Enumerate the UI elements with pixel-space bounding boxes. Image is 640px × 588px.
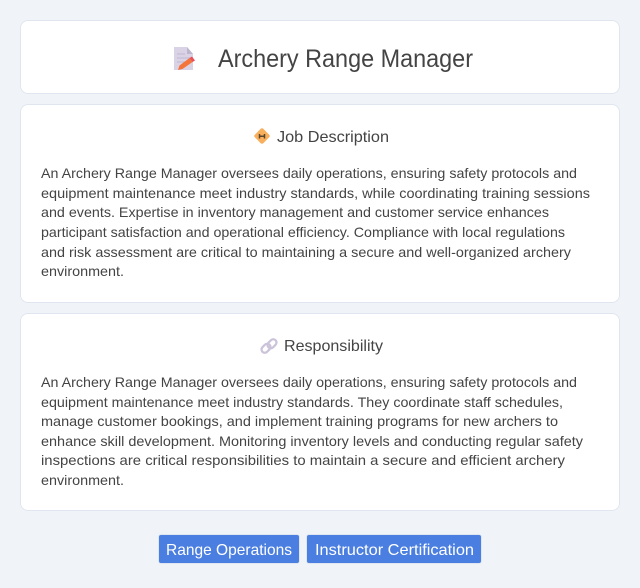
text block: job description: participant satisfaction and operational efficiency. Compliance with local regulations <box>41 224 565 240</box>
panel: job description <box>20 104 620 303</box>
text block: job description: environment. <box>41 263 124 279</box>
button: Instructor Certification <box>306 534 482 564</box>
text block: responsibility: enhance skill development. Monitoring inventory levels and conducting regular safety <box>41 433 583 449</box>
icon: document with pencil <box>174 47 195 70</box>
text block: responsibility: inspections are critical responsibilities to maintain a secure and efficient archery <box>41 452 565 468</box>
text block: responsibility <box>41 374 583 488</box>
text block: job description: An Archery Range Manager oversees daily operations, ensuring safety protocols and <box>41 165 577 181</box>
heading: responsibility: Responsibility <box>284 338 383 355</box>
panel: title header <box>20 20 620 94</box>
button: Instructor Certification: Instructor Certification <box>315 542 474 559</box>
text block: responsibility: environment. <box>41 472 124 488</box>
text block: job description: and events. Expertise in inventory management and customer service enhances <box>41 204 549 220</box>
text block: responsibility: manage customer bookings, and implement training programs for new archers to <box>41 413 558 429</box>
icon: link <box>260 338 278 354</box>
icon: orange diamond sign <box>254 128 270 144</box>
button: Range Operations: Range Operations <box>166 542 292 559</box>
panel: responsibility <box>20 313 620 511</box>
text block: job description: equipment maintenance meet industry standards, while coordinating training sessions <box>41 185 590 201</box>
text block: job description: and risk assessment are critical to maintaining a secure and well-organized archery <box>41 244 571 260</box>
text block: job description <box>41 165 590 279</box>
button: Range Operations <box>158 534 300 564</box>
heading: job description: Job Description <box>277 129 389 146</box>
text block: responsibility: equipment maintenance meet industry standards. They coordinate staff schedules, <box>41 394 563 410</box>
text block: responsibility: An Archery Range Manager oversees daily operations, ensuring safety protocols and <box>41 374 577 390</box>
title: Archery Range Manager <box>218 45 473 73</box>
